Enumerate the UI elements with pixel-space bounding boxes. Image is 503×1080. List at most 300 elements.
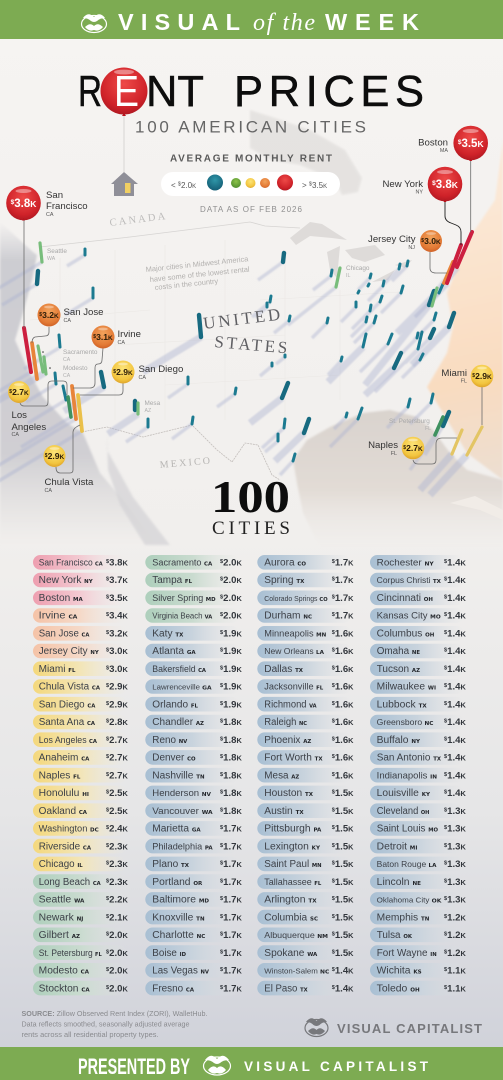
column 3: $ bbox=[332, 683, 336, 689]
column 2: Atlanta GA bbox=[152, 646, 196, 657]
column 1: $ bbox=[106, 790, 110, 796]
column 4: K bbox=[460, 896, 466, 905]
column 3: 1.6 bbox=[335, 664, 348, 675]
column 3: 1.6 bbox=[335, 682, 348, 693]
column 1: $ bbox=[106, 896, 110, 902]
balloon: Miami: $ bbox=[472, 373, 475, 379]
column 1: 2.3 bbox=[109, 859, 122, 870]
crimson bars bbox=[24, 232, 472, 372]
column 4: $ bbox=[444, 985, 448, 991]
column 1: K bbox=[122, 700, 128, 709]
title: E bbox=[114, 68, 139, 116]
column 4: K bbox=[460, 647, 466, 656]
map of the United States bbox=[0, 110, 503, 548]
legend: > bbox=[302, 181, 307, 190]
column 3: $ bbox=[332, 648, 336, 654]
column 3: K bbox=[348, 913, 354, 922]
column 4: 1.4 bbox=[447, 699, 461, 710]
balloon: Boston: K bbox=[477, 139, 484, 149]
column 3: $ bbox=[332, 967, 336, 973]
balloon: San Francisco: $ bbox=[11, 199, 15, 206]
column 3: $ bbox=[332, 878, 336, 884]
column 3: K bbox=[348, 842, 354, 851]
column 3: $ bbox=[332, 772, 336, 778]
column 3: K bbox=[348, 878, 354, 887]
column 4: 1.1 bbox=[447, 983, 461, 994]
balloon: Irvine: K bbox=[108, 335, 113, 342]
column 2: 1.7 bbox=[223, 983, 236, 994]
balloon: San Diego: 2.9 bbox=[116, 367, 128, 377]
column 3: K bbox=[348, 612, 354, 621]
column 1: 2.5 bbox=[109, 806, 123, 817]
column 2: K bbox=[236, 896, 242, 905]
column 1: $ bbox=[106, 825, 110, 831]
column 1: K bbox=[122, 647, 128, 656]
column 2: K bbox=[236, 984, 242, 993]
column 2: 1.8 bbox=[223, 788, 237, 799]
column 3: Raleigh NC bbox=[264, 717, 307, 728]
column 4: Toledo OH bbox=[377, 983, 420, 994]
small grey city labels: Chicago bbox=[346, 265, 370, 272]
title balloon bbox=[100, 68, 148, 116]
column 2: Philadelphia PA bbox=[152, 841, 213, 851]
column 2: $ bbox=[220, 648, 224, 654]
column 3: 1.5 bbox=[335, 824, 349, 835]
legend: K bbox=[323, 184, 327, 190]
column 4: K bbox=[460, 683, 466, 692]
yellow bars bbox=[78, 395, 82, 431]
column 2: Portland OR bbox=[152, 877, 203, 888]
column 4: Tucson AZ bbox=[377, 664, 420, 675]
column 2: 1.9 bbox=[223, 628, 236, 639]
column 2: Virginia Beach VA bbox=[152, 612, 213, 621]
column 2: Vancouver WA bbox=[152, 806, 213, 816]
column 3: Jacksonville FL bbox=[264, 682, 324, 692]
column 1: K bbox=[122, 594, 128, 603]
balloon: Boston: MA bbox=[440, 148, 448, 154]
column 2: K bbox=[236, 913, 242, 922]
column 3: Dallas TX bbox=[264, 664, 304, 675]
column 2: 2.0 bbox=[223, 557, 236, 568]
column 3: Mesa AZ bbox=[264, 770, 299, 781]
column 4: Indianapolis IN bbox=[377, 770, 438, 780]
balloon: Chula Vista: Chula Vista bbox=[44, 477, 94, 488]
column 2: 1.8 bbox=[223, 717, 237, 728]
balloon: Irvine: $ bbox=[93, 334, 96, 340]
small grey city labels: AZ bbox=[144, 408, 151, 414]
small grey city labels: CA bbox=[63, 373, 71, 379]
balloon: San Jose: CA bbox=[64, 318, 71, 324]
column 1: 2.7 bbox=[109, 770, 122, 781]
column 2: Orlando FL bbox=[152, 699, 199, 710]
column 2: 1.7 bbox=[223, 824, 236, 835]
column 1: 2.0 bbox=[109, 948, 122, 959]
column 2: $ bbox=[220, 896, 224, 902]
column 4: 1.2 bbox=[447, 912, 460, 923]
column 3: K bbox=[348, 949, 354, 958]
column 2: 1.7 bbox=[223, 841, 236, 852]
column 2: 2.0 bbox=[223, 611, 236, 622]
source note bbox=[22, 1011, 208, 1039]
column 3: 1.6 bbox=[335, 628, 348, 639]
column 3: Winston-Salem NC bbox=[264, 966, 329, 975]
column 2: $ bbox=[220, 719, 224, 725]
state lines bbox=[30, 240, 400, 430]
column 2: Lawrenceville GA bbox=[152, 683, 212, 692]
column 1: K bbox=[122, 558, 128, 567]
column 1: San Francisco CA bbox=[39, 557, 103, 567]
column 4: 1.3 bbox=[447, 859, 460, 870]
balloon: Naples: 2.7 bbox=[406, 443, 418, 453]
column 3 bbox=[257, 555, 354, 995]
column 1: 3.7 bbox=[109, 575, 122, 586]
column 3: K bbox=[348, 825, 354, 834]
column 1: St. Petersburg FL bbox=[39, 948, 102, 958]
column 4: K bbox=[460, 612, 466, 621]
column 4: Rochester NY bbox=[377, 557, 434, 567]
column 4: Wichita KS bbox=[377, 965, 422, 976]
column 1: $ bbox=[106, 701, 110, 707]
column 1: Newark NJ bbox=[39, 912, 83, 923]
column 1: Gilbert AZ bbox=[39, 930, 80, 941]
balloon: Boston bbox=[418, 126, 488, 161]
column 1: K bbox=[122, 789, 128, 798]
column 3: 1.5 bbox=[335, 877, 349, 888]
column 4: $ bbox=[444, 843, 448, 849]
column 4: $ bbox=[444, 559, 448, 565]
column 4: K bbox=[460, 629, 466, 638]
column 2: Plano TX bbox=[152, 859, 190, 870]
map annotation bbox=[145, 254, 250, 292]
column 1: 2.9 bbox=[109, 682, 122, 693]
column 1: K bbox=[122, 825, 128, 834]
column 3: Richmond VA bbox=[264, 699, 317, 710]
column 1: $ bbox=[106, 683, 110, 689]
column 4: $ bbox=[444, 719, 448, 725]
column 2: 1.7 bbox=[223, 965, 236, 976]
balloon: Chula Vista: CA bbox=[44, 488, 52, 494]
column 2: K bbox=[236, 878, 242, 887]
column 1: Long Beach CA bbox=[39, 877, 101, 888]
balloon: Jersey City bbox=[368, 230, 442, 252]
legend: K bbox=[192, 184, 196, 190]
column 1: $ bbox=[106, 807, 110, 813]
balloon: San Diego bbox=[112, 360, 183, 384]
column 2: K bbox=[236, 700, 242, 709]
title: NT bbox=[146, 68, 204, 116]
balloon: San Jose: 3.2 bbox=[42, 310, 54, 320]
column 2: Las Vegas NV bbox=[152, 965, 210, 976]
column 4: $ bbox=[444, 931, 448, 937]
title bbox=[78, 68, 424, 116]
balloon: New York: NY bbox=[416, 190, 423, 196]
column 1: $ bbox=[106, 630, 110, 636]
column 2: Sacramento CA bbox=[152, 557, 213, 567]
column 1: New York NY bbox=[39, 575, 93, 586]
footer banner: VISUAL CAPITALIST bbox=[244, 1059, 429, 1074]
column 3: Houston TX bbox=[264, 788, 314, 799]
column 2: Bakersfield CA bbox=[152, 664, 207, 674]
balloon: New York: New York bbox=[382, 179, 423, 190]
dark green bars bbox=[68, 397, 443, 435]
balloon: Jersey City: K bbox=[436, 239, 441, 246]
column 2: $ bbox=[220, 736, 224, 742]
balloon: Chula Vista: 2.9 bbox=[48, 451, 60, 461]
great lakes bbox=[290, 222, 412, 282]
column 4: K bbox=[460, 594, 466, 603]
map text: United States: STATES bbox=[214, 332, 291, 358]
column 2: 1.9 bbox=[223, 699, 236, 710]
column 4: K bbox=[460, 665, 466, 674]
column 3: 1.4 bbox=[335, 983, 349, 994]
column 3: 1.5 bbox=[335, 841, 349, 852]
column 3: Spokane WA bbox=[264, 948, 318, 959]
column 3: Austin TX bbox=[264, 806, 304, 817]
column 2: K bbox=[236, 966, 242, 975]
column 2: K bbox=[236, 629, 242, 638]
column 4: 1.3 bbox=[447, 895, 460, 906]
balloon: Miami: Miami bbox=[441, 368, 467, 379]
column 3: K bbox=[348, 771, 354, 780]
column 1: K bbox=[122, 754, 128, 763]
column 1: 3.5 bbox=[109, 593, 123, 604]
column 2: $ bbox=[220, 878, 224, 884]
column 3: $ bbox=[332, 861, 336, 867]
column 4: 1.4 bbox=[447, 575, 461, 586]
legend: 2.0 bbox=[181, 181, 193, 190]
column 2: Marietta GA bbox=[152, 824, 201, 835]
column 1: 2.0 bbox=[109, 930, 122, 941]
column 4: $ bbox=[444, 612, 448, 618]
column 4: $ bbox=[444, 594, 448, 600]
column 3: K bbox=[348, 736, 354, 745]
column 3: $ bbox=[332, 914, 336, 920]
column 2: $ bbox=[220, 577, 224, 583]
column 4: K bbox=[460, 736, 466, 745]
column 4: $ bbox=[444, 967, 448, 973]
column 4: K bbox=[460, 931, 466, 940]
column 3: K bbox=[348, 647, 354, 656]
column 3: K bbox=[348, 896, 354, 905]
balloon: Naples: Naples bbox=[368, 440, 398, 451]
column 4: K bbox=[460, 700, 466, 709]
column 3: K bbox=[348, 966, 354, 975]
column 4: $ bbox=[444, 772, 448, 778]
balloon: Irvine: 3.1 bbox=[96, 332, 108, 342]
column 3: K bbox=[348, 700, 354, 709]
column 2: Knoxville TN bbox=[152, 912, 205, 923]
column 1: $ bbox=[106, 559, 110, 565]
small grey city labels: FL bbox=[425, 426, 431, 432]
column 2: 1.8 bbox=[223, 806, 237, 817]
map text: Mexico: MEXICO bbox=[159, 455, 213, 471]
city bars on map bbox=[24, 232, 482, 461]
balloon: Irvine bbox=[92, 326, 141, 348]
column 1: 3.0 bbox=[109, 646, 122, 657]
column 4: K bbox=[460, 771, 466, 780]
column 1: Naples FL bbox=[39, 770, 81, 781]
column 3: Minneapolis MN bbox=[264, 628, 327, 638]
leader lines bbox=[20, 160, 482, 473]
column 1: Oakland CA bbox=[39, 806, 88, 817]
header banner: of the bbox=[253, 10, 315, 36]
column 2: $ bbox=[220, 807, 224, 813]
header text: VISUAL bbox=[118, 9, 240, 35]
column 2: K bbox=[236, 594, 242, 603]
column 3: 1.5 bbox=[335, 806, 349, 817]
column 3: K bbox=[348, 594, 354, 603]
column 4: Greensboro NC bbox=[377, 718, 433, 727]
column 1: $ bbox=[106, 914, 110, 920]
column 2: $ bbox=[220, 612, 224, 618]
balloon: Los Angeles: $ bbox=[9, 389, 12, 395]
column 2: $ bbox=[220, 825, 224, 831]
column 2: $ bbox=[220, 914, 224, 920]
column 1: $ bbox=[106, 861, 110, 867]
column 4: San Antonio TX bbox=[377, 753, 442, 764]
subtitle: 100 AMERICAN CITIES bbox=[135, 118, 366, 136]
column 4: 1.3 bbox=[447, 824, 460, 835]
column 3: Fort Worth TX bbox=[264, 753, 323, 764]
column 4: $ bbox=[444, 807, 448, 813]
column 4: K bbox=[460, 949, 466, 958]
column 2: $ bbox=[220, 772, 224, 778]
column 1: 3.2 bbox=[109, 628, 122, 639]
column 3: K bbox=[348, 558, 354, 567]
small grey city labels: Sacramento bbox=[63, 349, 98, 356]
column 1: K bbox=[122, 718, 128, 727]
balloon: Miami: K bbox=[487, 374, 492, 381]
column 3: $ bbox=[332, 665, 336, 671]
column 3: K bbox=[348, 789, 354, 798]
map annotation: costs in the country bbox=[154, 276, 219, 292]
column 1: 2.5 bbox=[109, 788, 123, 799]
column 2: K bbox=[236, 931, 242, 940]
column 2: Charlotte NC bbox=[152, 930, 205, 941]
column 1: K bbox=[122, 896, 128, 905]
column 2: K bbox=[236, 860, 242, 869]
column 3: $ bbox=[332, 931, 336, 937]
column 4: K bbox=[460, 576, 466, 585]
title balloon string bbox=[123, 115, 125, 172]
column 1: K bbox=[122, 966, 128, 975]
column 4: K bbox=[460, 754, 466, 763]
column 3: Saint Paul MN bbox=[264, 859, 322, 870]
column 2: Denver CO bbox=[152, 753, 196, 764]
column 2: K bbox=[236, 718, 242, 727]
column 4: Lincoln NE bbox=[377, 877, 421, 888]
green bars bbox=[38, 243, 437, 414]
column 2: K bbox=[236, 949, 242, 958]
column 2 bbox=[145, 555, 242, 995]
column 3: 1.6 bbox=[335, 717, 348, 728]
balloon: Los Angeles bbox=[8, 381, 46, 438]
column 4: $ bbox=[444, 630, 448, 636]
column 3: 1.7 bbox=[335, 575, 348, 586]
column 2: 1.7 bbox=[223, 877, 236, 888]
column 3: $ bbox=[332, 719, 336, 725]
hudson bay bbox=[250, 110, 362, 195]
gulf of california bbox=[107, 432, 170, 545]
column 2: 1.7 bbox=[223, 948, 236, 959]
column 1 bbox=[33, 555, 128, 995]
column 2: 1.8 bbox=[223, 770, 237, 781]
column 1: $ bbox=[106, 736, 110, 742]
column 3: 1.7 bbox=[335, 611, 348, 622]
small grey city labels: WA bbox=[47, 256, 56, 262]
column 4: Cincinnati OH bbox=[377, 593, 433, 604]
column 2: $ bbox=[220, 701, 224, 707]
column 1: K bbox=[122, 683, 128, 692]
column 4: $ bbox=[444, 861, 448, 867]
column 4: Oklahoma City OK bbox=[377, 896, 442, 905]
column 1: K bbox=[122, 878, 128, 887]
column 3: $ bbox=[332, 896, 336, 902]
column 4: K bbox=[460, 984, 466, 993]
column 1: Anaheim CA bbox=[39, 753, 90, 764]
column 2: $ bbox=[220, 630, 224, 636]
column 1: Irvine CA bbox=[39, 611, 78, 622]
small grey city labels: Mesa bbox=[144, 400, 161, 407]
column 4: $ bbox=[444, 701, 448, 707]
balloon: Jersey City: $ bbox=[421, 238, 424, 244]
column 2: $ bbox=[220, 985, 224, 991]
balloon: San Diego: $ bbox=[113, 369, 116, 375]
column 4: K bbox=[460, 878, 466, 887]
map annotation: have some of the lowest rental bbox=[149, 265, 250, 284]
column 4: 1.4 bbox=[447, 788, 461, 799]
column 1: K bbox=[122, 629, 128, 638]
data date: DATA AS OF FEB 2026 bbox=[200, 205, 303, 214]
column 1: 2.2 bbox=[109, 895, 122, 906]
column 3: $ bbox=[332, 825, 336, 831]
column 3: $ bbox=[332, 701, 336, 707]
column 4: Baton Rouge LA bbox=[377, 860, 437, 869]
column 2: Henderson NV bbox=[152, 788, 212, 798]
gulf of mexico bbox=[293, 410, 503, 548]
column 1: 2.7 bbox=[109, 753, 122, 764]
column 1: Chicago IL bbox=[39, 859, 83, 870]
column 1: $ bbox=[106, 594, 110, 600]
map annotation: Major cities in Midwest America bbox=[145, 254, 250, 274]
column 2: K bbox=[236, 789, 242, 798]
column 4 bbox=[370, 555, 466, 995]
column 3: 1.6 bbox=[335, 770, 348, 781]
column 3: $ bbox=[332, 949, 336, 955]
column 1: K bbox=[122, 842, 128, 851]
header logo bbox=[82, 14, 106, 32]
column 2: K bbox=[236, 612, 242, 621]
column 4: $ bbox=[444, 825, 448, 831]
column 1: Santa Ana CA bbox=[39, 717, 96, 728]
legend bbox=[161, 172, 340, 196]
column 4: K bbox=[460, 807, 466, 816]
small grey city labels bbox=[47, 248, 431, 432]
balloon: Los Angeles: K bbox=[24, 390, 29, 397]
column 3: $ bbox=[332, 736, 336, 742]
column 3: $ bbox=[332, 594, 336, 600]
wide teal bars bbox=[37, 253, 454, 433]
column 2: Fresno CA bbox=[152, 983, 195, 994]
balloon: New York: $ bbox=[432, 180, 436, 187]
column 1: $ bbox=[106, 843, 110, 849]
column 1: $ bbox=[106, 985, 110, 991]
balloon: San Diego: San Diego bbox=[138, 364, 183, 375]
legend heading: AVERAGE MONTHLY RENT bbox=[170, 154, 332, 164]
column 3: $ bbox=[332, 612, 336, 618]
teal bars bbox=[55, 249, 443, 461]
column 3: 1.7 bbox=[335, 557, 348, 568]
